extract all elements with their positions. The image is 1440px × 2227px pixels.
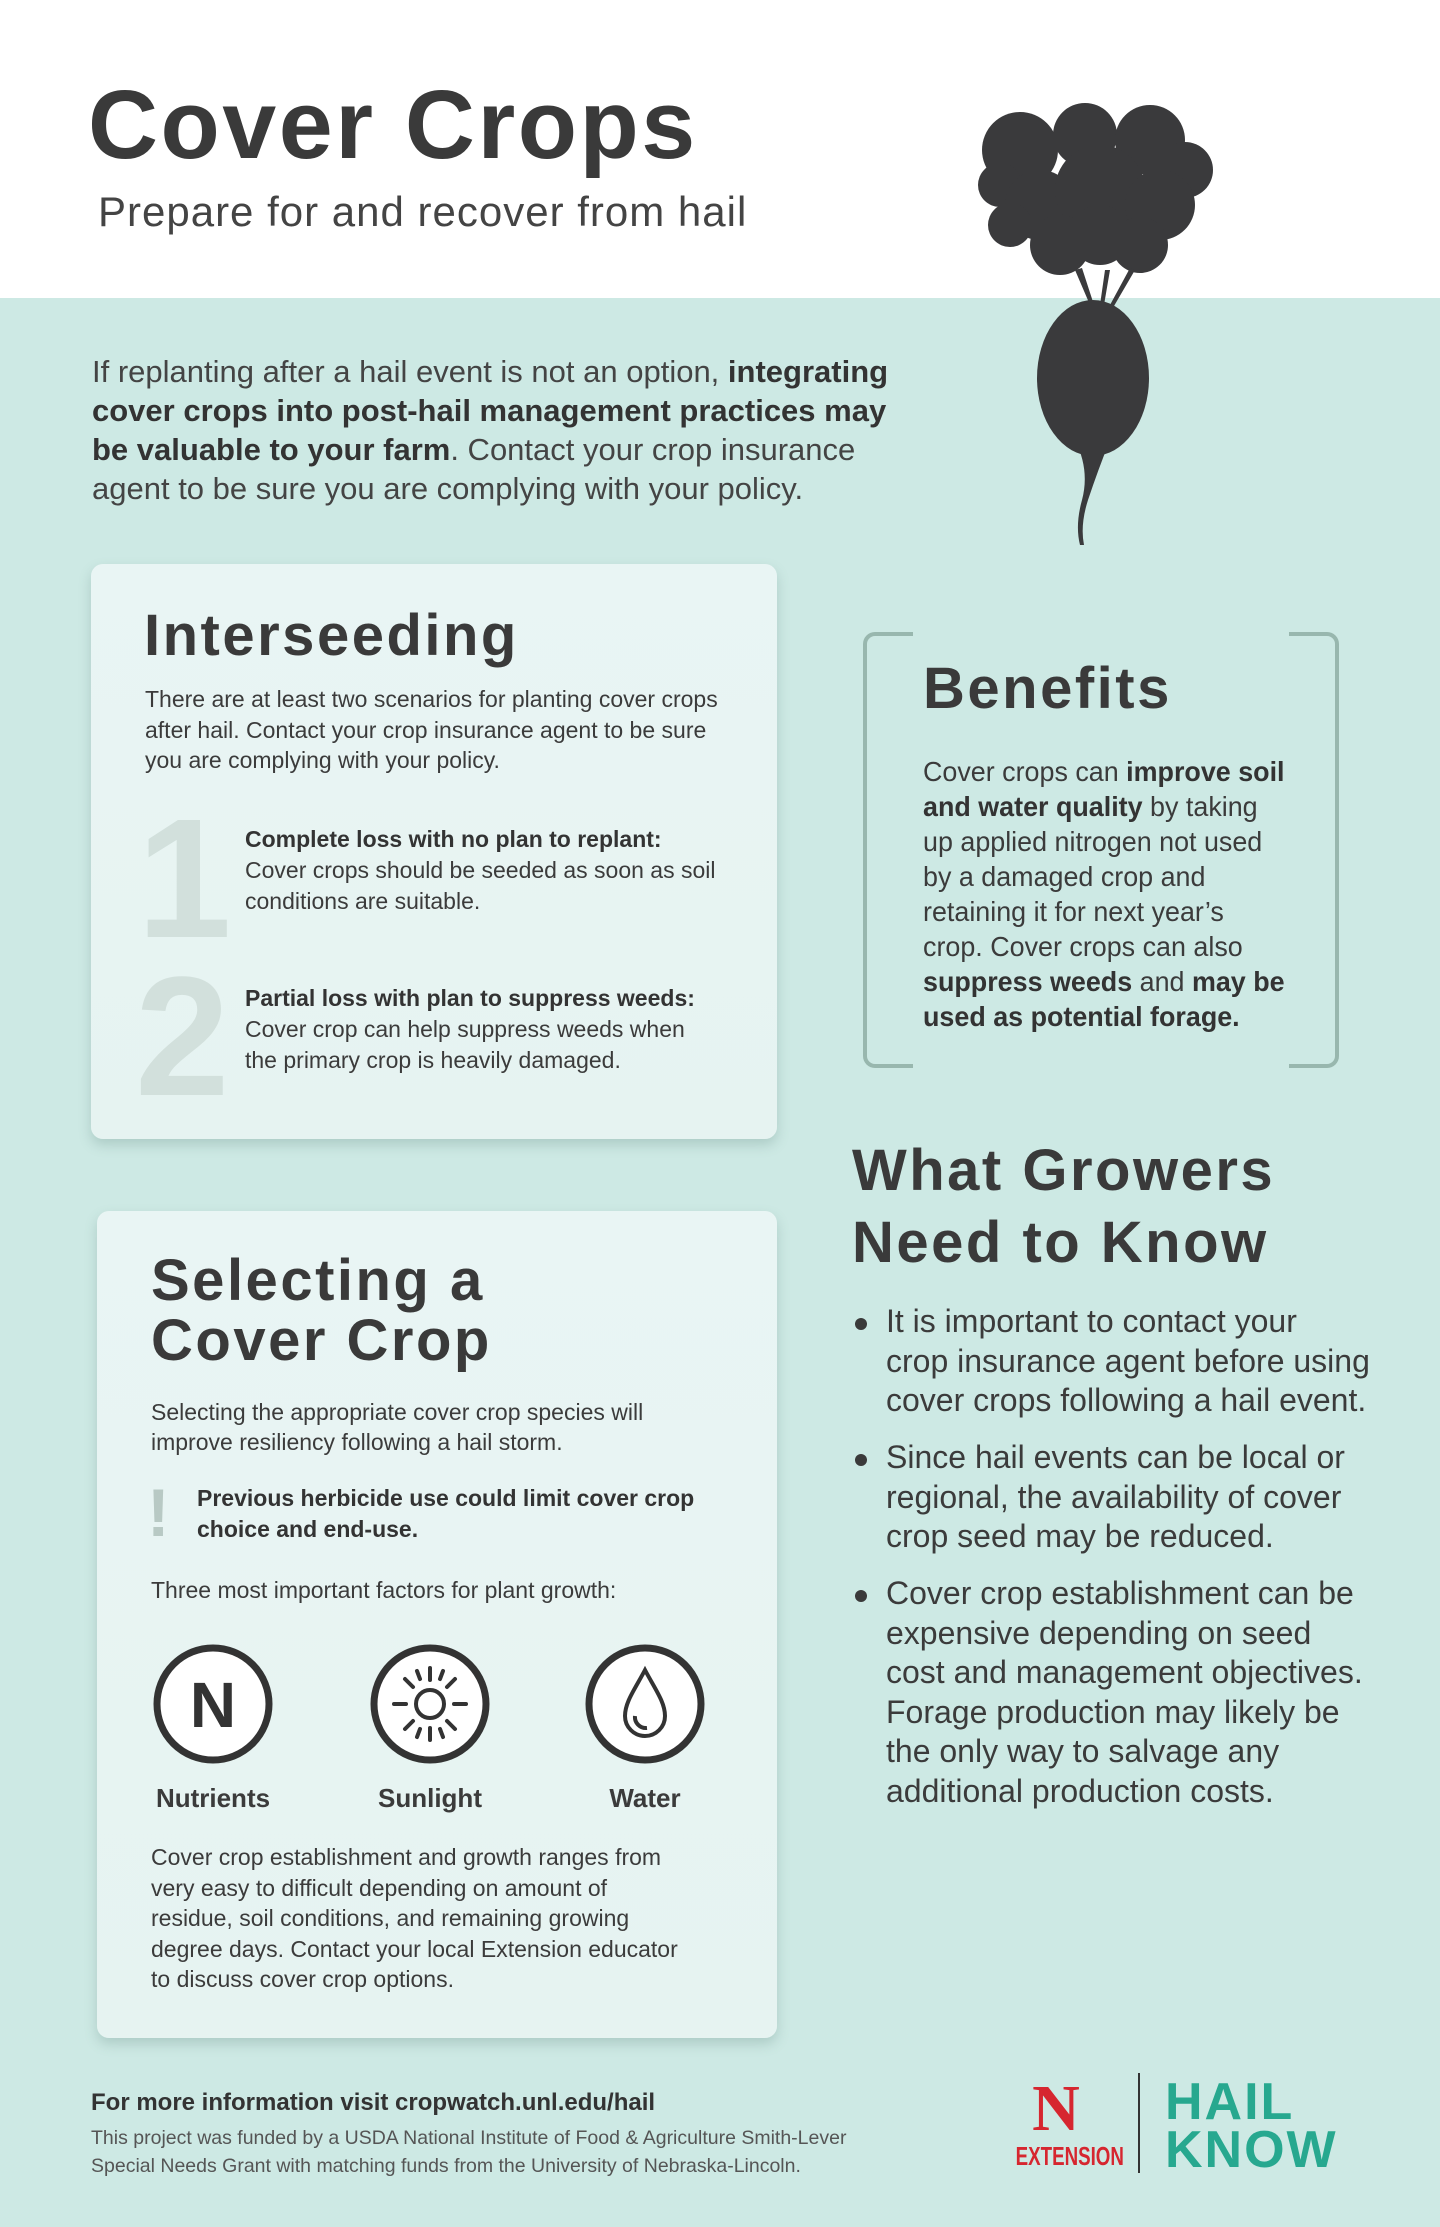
interseeding intro text: after hail. Contact your crop insurance agent to be sure (145, 716, 706, 742)
benefits text: crop. Cover crops can also (923, 931, 1243, 962)
interseeding intro text: you are complying with your policy. (145, 747, 500, 773)
benefits text: retaining it for next year’s (923, 896, 1224, 927)
bracket left (863, 632, 913, 1068)
subtitle: Prepare for and recover from hail (98, 188, 747, 235)
logo: nebraska extension (1016, 2072, 1124, 2171)
text: cost and management objectives. (886, 1654, 1363, 1690)
closing paragraph: to discuss cover crop options. (151, 1966, 454, 1992)
bracket right (1289, 632, 1339, 1068)
number 1: 1 (137, 784, 232, 974)
warning text: choice and end-use. (197, 1516, 418, 1542)
text: Forage production may likely be (886, 1694, 1340, 1730)
closing paragraph: residue, soil conditions, and remaining growing (151, 1905, 629, 1931)
heading: interseeding: Interseeding (144, 603, 519, 668)
text: crop seed may be reduced. (886, 1518, 1274, 1554)
heading: what growers need to know: What Growers (852, 1138, 1275, 1203)
bullet 1 (855, 1303, 1370, 1418)
icon: water: Water (609, 1783, 681, 1813)
logo: hail know: KNOW (1165, 2121, 1338, 2179)
intro paragraph: agent to be sure you are complying with your policy. (92, 471, 803, 506)
intro paragraph (92, 354, 888, 506)
bullet 3 (855, 1575, 1363, 1808)
footer text: For more information visit cropwatch.unl.edu/hail (91, 2089, 655, 2116)
closing paragraph: very easy to difficult depending on amount of (151, 1874, 607, 1900)
scenario 1 text (245, 826, 716, 914)
scenario 2 text: Cover crop can help suppress weeds when (245, 1016, 685, 1042)
closing paragraph (151, 1844, 678, 1992)
benefits text: used as potential forage. (923, 1001, 1240, 1032)
heading: selecting a cover crop: Selecting a (151, 1248, 485, 1313)
divider (1138, 2073, 1140, 2173)
scenario 1 text: Cover crops should be seeded as soon as soil (245, 857, 716, 883)
intro paragraph: cover crops into post-hail management practices may (92, 393, 886, 428)
heading: benefits: Benefits (923, 656, 1172, 721)
interseeding intro text (145, 686, 718, 773)
heading: what growers need to know: Need to Know (852, 1210, 1269, 1275)
title: Cover Crops (88, 70, 698, 179)
factors label: Three most important factors for plant growth: (151, 1577, 616, 1603)
logo: hail know (1165, 2073, 1338, 2179)
scenario 2 text (245, 985, 695, 1073)
icon: sunlight: Sunlight (378, 1783, 482, 1813)
benefits text: suppress weeds and may be (923, 966, 1285, 997)
bullet 2 (855, 1439, 1345, 1554)
panel: interseeding (91, 564, 777, 1139)
warning text (197, 1485, 694, 1542)
closing paragraph: degree days. Contact your local Extension educator (151, 1936, 678, 1962)
logo: hail know: HAIL (1165, 2073, 1294, 2131)
selecting intro: Selecting the appropriate cover crop species will (151, 1399, 643, 1425)
selecting intro: improve resiliency following a hail storm. (151, 1429, 563, 1455)
heading: what growers need to know (852, 1138, 1275, 1275)
scenario 1 text: conditions are suitable. (245, 888, 480, 914)
benefits text: by a damaged crop and (923, 861, 1205, 892)
number 2: 2 (135, 942, 230, 1132)
logo: nebraska extension: N (1032, 2072, 1080, 2145)
footer text: Special Needs Grant with matching funds from the University of Nebraska-Lincoln. (91, 2155, 801, 2177)
icon: nutrients: Nutrients (156, 1783, 270, 1813)
icon: sunlight (370, 1644, 490, 1813)
text: It is important to contact your (886, 1303, 1297, 1339)
icon: water (586, 1644, 704, 1813)
selecting intro (151, 1399, 643, 1455)
benefits text (923, 756, 1285, 1032)
text: cover crops following a hail event. (886, 1382, 1366, 1418)
footer text: This project was funded by a USDA National Institute of Food & Agriculture Smith-Lever (91, 2127, 846, 2149)
panel: selecting a cover crop (97, 1211, 777, 2038)
footer text (91, 2089, 846, 2177)
warning text: Previous herbicide use could limit cover crop (197, 1485, 694, 1511)
scenario 2 text: the primary crop is heavily damaged. (245, 1047, 621, 1073)
text: Since hail events can be local or (886, 1439, 1345, 1475)
text: the only way to salvage any (886, 1733, 1279, 1769)
bullet list (855, 1303, 1370, 1808)
header white band (0, 0, 1440, 298)
panel: benefits (bracketed) (863, 632, 1339, 1068)
text: regional, the availability of cover (886, 1478, 1341, 1514)
text: crop insurance agent before using (886, 1342, 1370, 1378)
heading: selecting a cover crop (151, 1248, 492, 1373)
logo: nebraska extension: EXTENSION (1016, 2141, 1124, 2171)
icon: beet silhouette (978, 103, 1213, 545)
icon: nutrients: N (190, 1669, 236, 1741)
benefits text: Cover crops can improve soil (923, 756, 1285, 787)
closing paragraph: Cover crop establishment and growth ranges from (151, 1844, 661, 1870)
benefits text: and water quality by taking (923, 791, 1258, 822)
interseeding intro text: There are at least two scenarios for planting cover crops (145, 686, 718, 712)
text: Cover crop establishment can be (886, 1575, 1354, 1611)
text: expensive depending on seed (886, 1614, 1311, 1650)
heading: selecting a cover crop: Cover Crop (151, 1308, 492, 1373)
intro paragraph: be valuable to your farm. Contact your crop insurance (92, 432, 855, 467)
scenario 1 text: Complete loss with no plan to replant: (245, 826, 662, 852)
text: additional production costs. (886, 1772, 1274, 1808)
intro paragraph: If replanting after a hail event is not an option, integrating (92, 354, 888, 389)
icon: exclamation: ! (147, 1475, 170, 1551)
scenario 2 text: Partial loss with plan to suppress weeds: (245, 985, 695, 1011)
benefits text: up applied nitrogen not used (923, 826, 1262, 857)
icon: nutrients (154, 1644, 272, 1813)
